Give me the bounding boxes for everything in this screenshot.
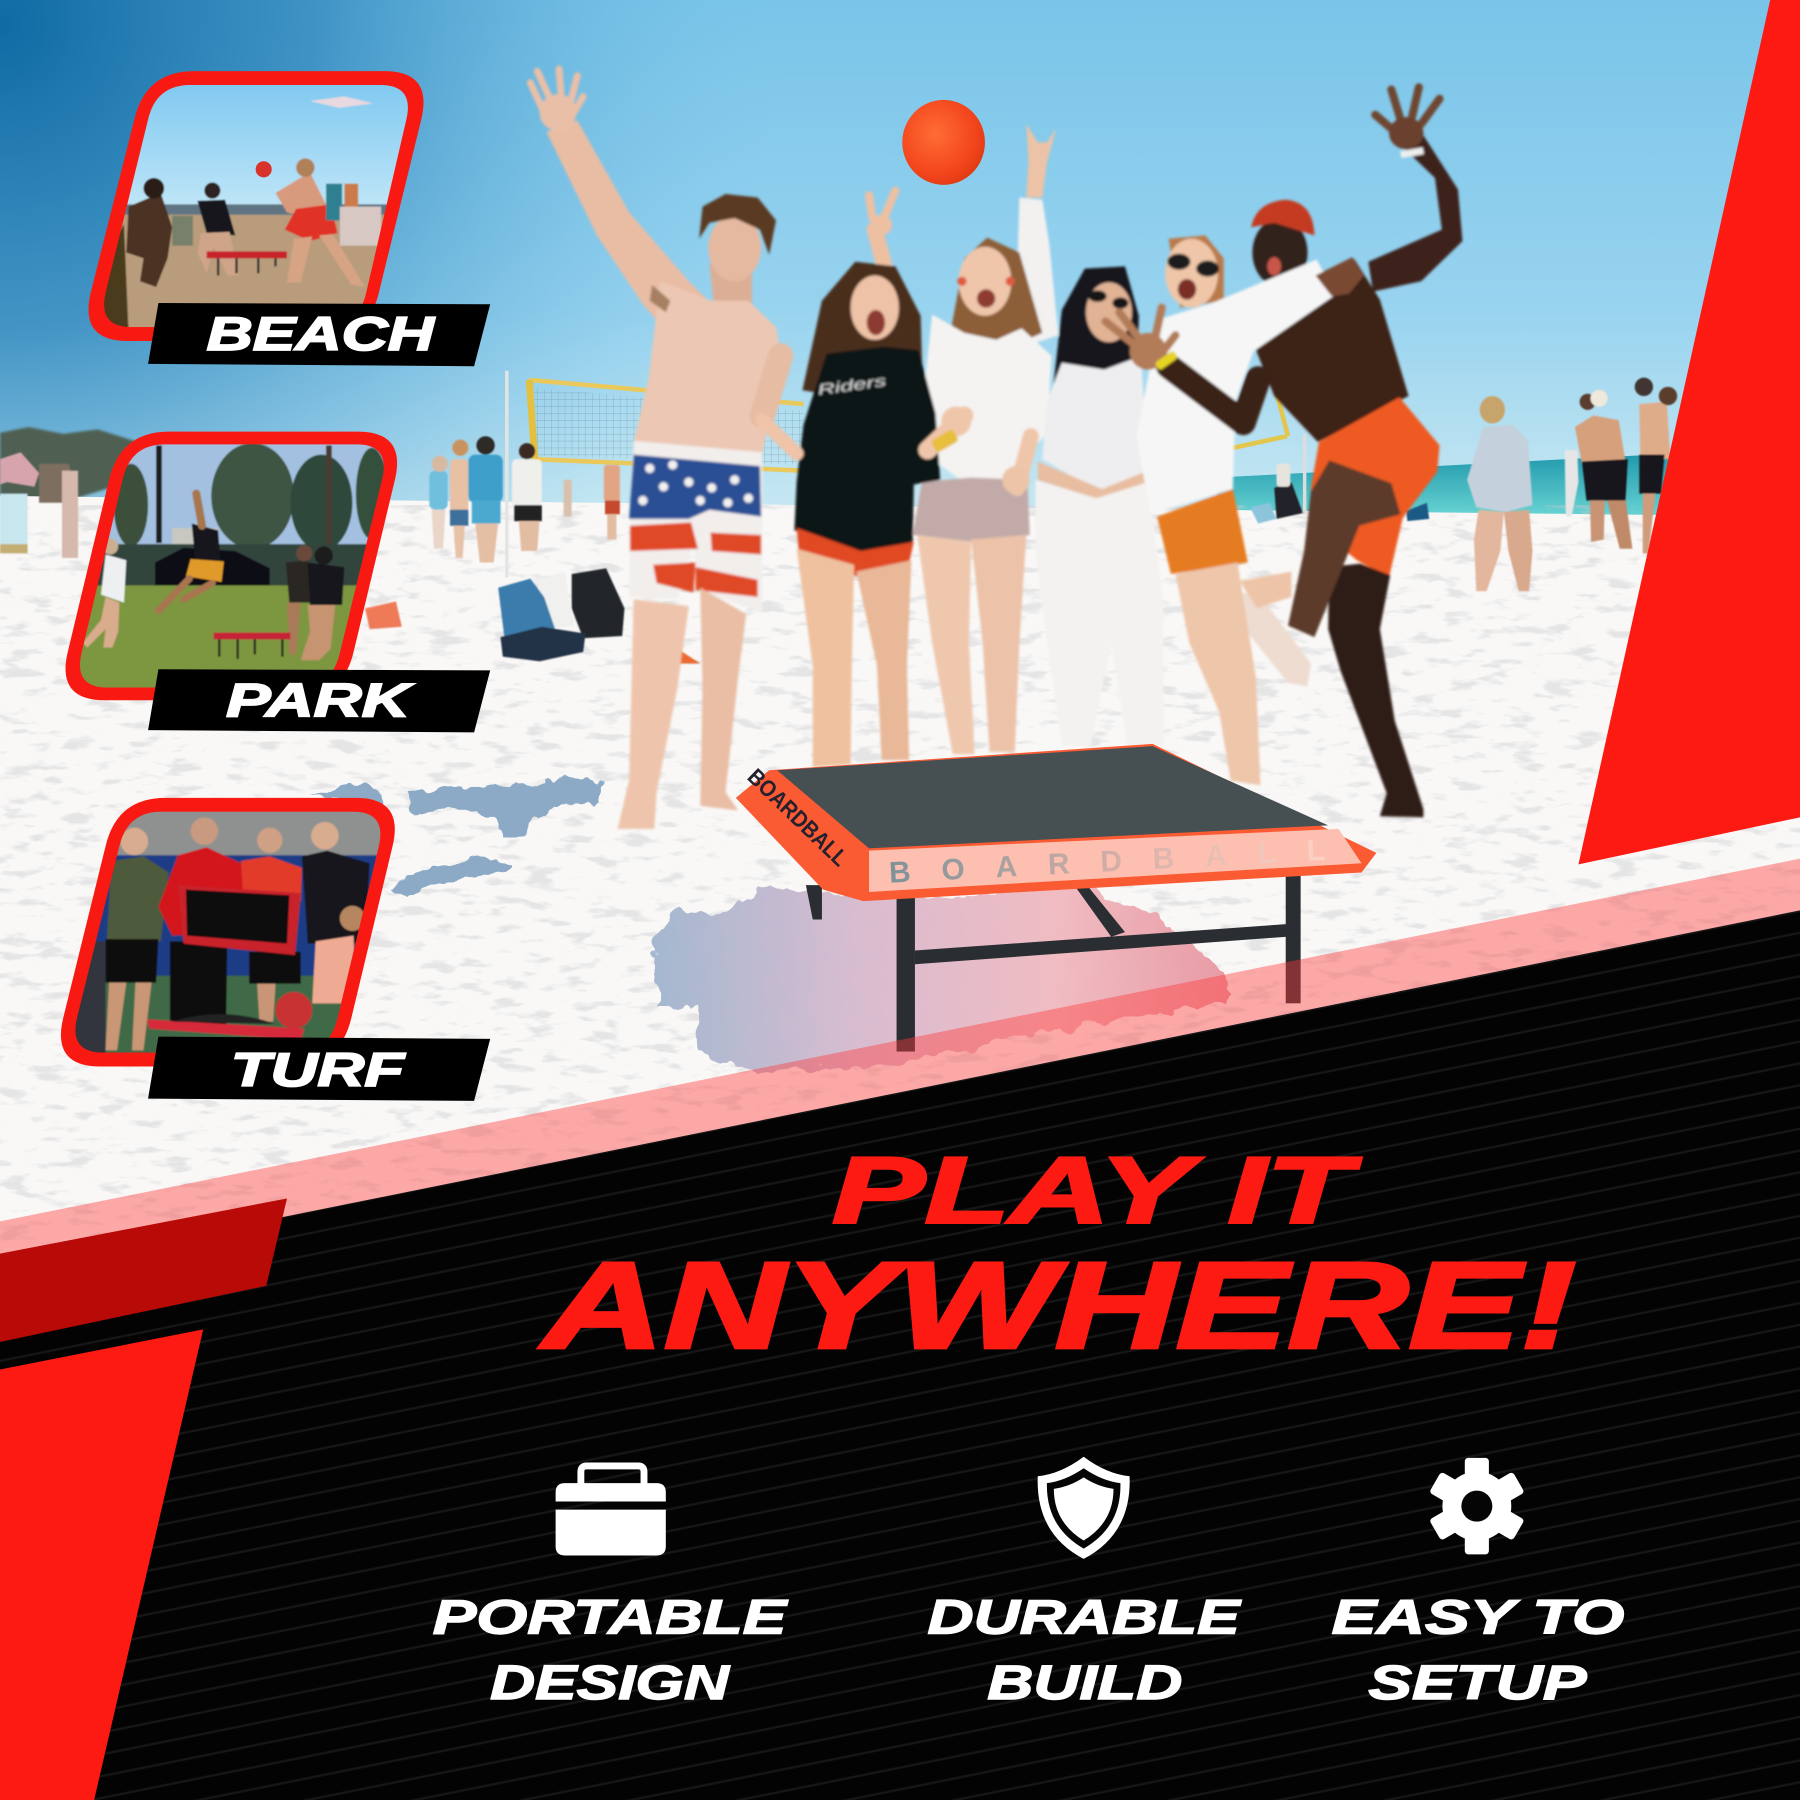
location card: turf [57, 798, 490, 1101]
easy to setup text: SETUP [1368, 1656, 1588, 1710]
table on turf [147, 1019, 304, 1040]
beach huts on far left [0, 452, 78, 558]
portable design text: PORTABLE [433, 1591, 789, 1645]
board surface [777, 746, 1328, 848]
turf ball [276, 992, 312, 1029]
location card: park [57, 432, 490, 732]
main player: woman in black sweatshirt [762, 262, 971, 767]
durable build text: DURABLE [928, 1591, 1242, 1645]
board legs [806, 870, 1301, 1052]
main player: woman in white sweatpants [1035, 266, 1164, 746]
main player: woman with sunglasses and orange shorts [1105, 235, 1364, 785]
black lower panel [0, 910, 1800, 1800]
background people: gray sweatshirt woman [1467, 396, 1533, 591]
background photo: hills [0, 427, 161, 501]
icon: gear [1429, 1458, 1525, 1554]
background photo: sea [1217, 453, 1676, 519]
blue sand shadows [313, 776, 600, 897]
red corner panel: bottom left [0, 1329, 203, 1800]
main players group [530, 69, 1462, 829]
durable build text: BUILD [987, 1656, 1182, 1710]
player black shirt [302, 851, 370, 944]
turf photo frame [61, 798, 395, 1066]
main player: flag shorts [530, 69, 783, 829]
park label text: PARK [226, 673, 414, 726]
background people: right group [1565, 378, 1677, 553]
heading: anywhere: ANYWHERE! [539, 1238, 1576, 1375]
location card: beach [69, 71, 490, 366]
background people: left group [429, 436, 620, 562]
beach photo [104, 85, 408, 327]
icon: briefcase [556, 1466, 666, 1555]
park photo [80, 444, 384, 688]
main player: man with red cap [1234, 87, 1462, 817]
board front panel [869, 829, 1361, 892]
background people: sitting by the water [1250, 464, 1429, 523]
player green shirt [107, 856, 169, 941]
turf label bar [148, 1037, 490, 1101]
player crouching [312, 936, 356, 1003]
main player: raised white sleeve arm [1017, 124, 1058, 344]
feature: easy to setup [1332, 1458, 1638, 1710]
background photo: sand [0, 496, 1800, 1274]
beach label bar [148, 303, 490, 366]
orange ball [902, 100, 985, 185]
background photo: sky [0, 0, 1800, 517]
pink diagonal band [0, 859, 1800, 1277]
turf photo [75, 812, 380, 1053]
board front text: BOARDBALL [888, 834, 1326, 890]
main player: woman in black sweatshirt: Riders [817, 372, 888, 399]
park label bar [148, 669, 490, 732]
red corner panel: top right [1578, 0, 1800, 864]
board side text: BOARDBALL [743, 763, 853, 871]
volleyball net [505, 371, 1306, 577]
beach photo frame [88, 71, 424, 341]
dark red accent [0, 1198, 287, 1342]
main player: woman in white sweater [869, 191, 1052, 754]
heading: play it: PLAY IT [832, 1138, 1362, 1243]
park photo frame [66, 432, 397, 700]
feature: portable design [433, 1466, 800, 1710]
board frame [736, 744, 1376, 901]
held board [178, 885, 301, 955]
beach label text: BEACH [207, 307, 435, 360]
sand pile under the board [654, 884, 1231, 1070]
feature: durable build [928, 1457, 1253, 1710]
icon: shield [1038, 1457, 1130, 1559]
player orange shirt [241, 856, 302, 901]
beach bags [365, 568, 700, 664]
player red jacket [158, 847, 247, 936]
boardball board [736, 744, 1376, 1052]
turf label text: TURF [231, 1043, 406, 1096]
portable design text: DESIGN [490, 1656, 730, 1710]
easy to setup text: EASY TO [1332, 1591, 1624, 1645]
